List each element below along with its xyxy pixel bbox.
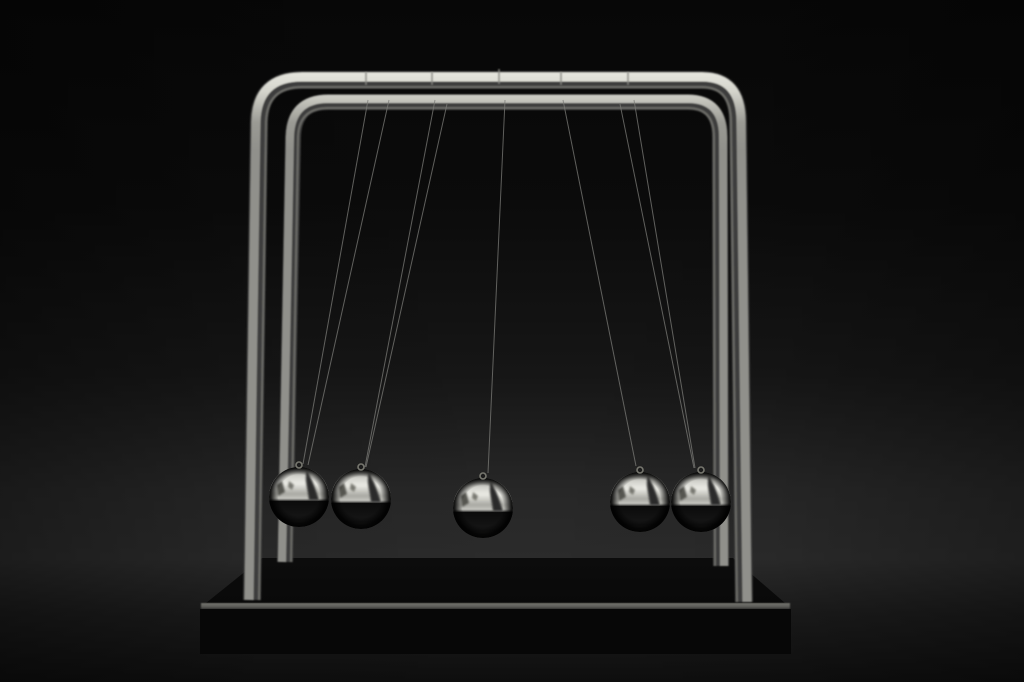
string knots on the top bars	[365, 69, 629, 85]
ball 3	[453, 473, 513, 538]
front arch of the frame	[249, 77, 747, 602]
ball 2	[331, 464, 391, 529]
strings	[303, 100, 695, 473]
ball 1	[269, 462, 329, 527]
ball 4	[610, 467, 670, 532]
wooden base	[200, 558, 791, 654]
back arch of the frame	[282, 99, 724, 566]
base front edge highlight	[201, 603, 790, 610]
base front face	[200, 609, 791, 654]
steel balls	[269, 462, 731, 538]
base top face	[206, 558, 785, 603]
ball 5	[671, 467, 731, 532]
